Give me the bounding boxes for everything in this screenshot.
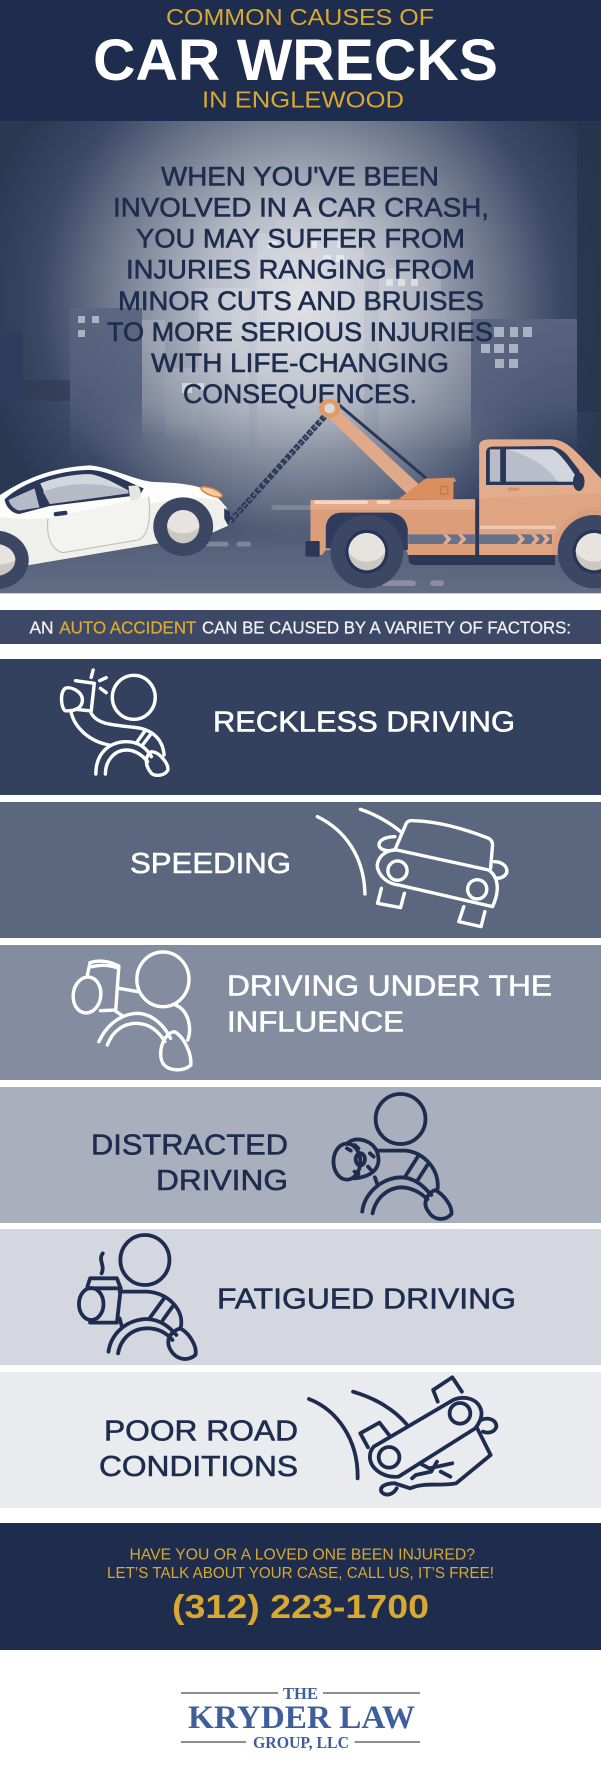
intro paragraph: YOU MAY SUFFER FROM — [136, 224, 465, 254]
hero illustration — [0, 121, 601, 593]
icon: driver with phone — [62, 670, 168, 775]
intro paragraph: CONSEQUENCES. — [183, 379, 417, 409]
panel: poor road conditions — [0, 1372, 601, 1508]
intro paragraph — [107, 162, 493, 409]
road — [0, 505, 601, 593]
icon: overturned car — [309, 1377, 496, 1495]
panel: fatigued driving — [0, 1229, 601, 1365]
white car — [0, 465, 230, 589]
icon: driver with drink — [71, 952, 191, 1070]
panel: driving under the influence — [0, 945, 601, 1080]
title header: COMMON CAUSES OF — [166, 4, 434, 30]
intro paragraph: MINOR CUTS AND BRUISES — [118, 286, 484, 316]
panel: reckless driving — [0, 659, 601, 795]
icon: car skidding — [317, 809, 507, 927]
title header — [0, 0, 601, 121]
panel: driving under the influence: DRIVING UNDER THE — [227, 971, 552, 1003]
sub-heading bar: AN — [30, 617, 54, 637]
logo: THE — [283, 1684, 318, 1703]
call to action: (312) 223-1700 — [172, 1588, 429, 1625]
panel: reckless driving: RECKLESS DRIVING — [213, 707, 515, 739]
tow chain — [230, 415, 326, 522]
panel: distracted driving: DISTRACTED — [91, 1129, 288, 1161]
panel: distracted driving — [0, 1087, 601, 1223]
title header: IN ENGLEWOOD — [202, 87, 404, 113]
sub-heading bar — [0, 610, 601, 644]
tow truck — [305, 399, 601, 588]
logo: KRYDER LAW — [188, 1700, 415, 1736]
call to action: HAVE YOU OR A LOVED ONE BEEN INJURED? — [130, 1546, 475, 1563]
call to action — [0, 1523, 601, 1650]
intro paragraph: WITH LIFE-CHANGING — [151, 348, 449, 378]
panel: poor road conditions: CONDITIONS — [99, 1451, 298, 1483]
panel: fatigued driving: FATIGUED DRIVING — [217, 1283, 516, 1315]
panel: distracted driving: DRIVING — [156, 1165, 288, 1197]
intro paragraph: INVOLVED IN A CAR CRASH, — [113, 193, 489, 223]
sub-heading bar: AUTO ACCIDENT — [59, 617, 197, 637]
logo — [181, 1684, 420, 1752]
sub-heading bar: CAN BE CAUSED BY A VARIETY OF FACTORS: — [202, 617, 571, 637]
panel: poor road conditions: POOR ROAD — [104, 1416, 298, 1448]
icon: driver eating — [333, 1094, 452, 1219]
title header: CAR WRECKS — [93, 28, 498, 93]
panel: driving under the influence: INFLUENCE — [227, 1007, 404, 1039]
panel: speeding: SPEEDING — [130, 848, 291, 880]
intro paragraph: TO MORE SERIOUS INJURIES — [107, 317, 493, 347]
intro paragraph: INJURIES RANGING FROM — [126, 255, 475, 285]
call to action: LET’S TALK ABOUT YOUR CASE, CALL US, IT’S FREE! — [107, 1565, 494, 1582]
city skyline — [0, 122, 601, 459]
intro paragraph: WHEN YOU'VE BEEN — [161, 162, 439, 192]
panel: speeding — [0, 802, 601, 938]
icon: driver with coffee — [79, 1235, 196, 1359]
logo: GROUP, LLC — [253, 1733, 349, 1752]
